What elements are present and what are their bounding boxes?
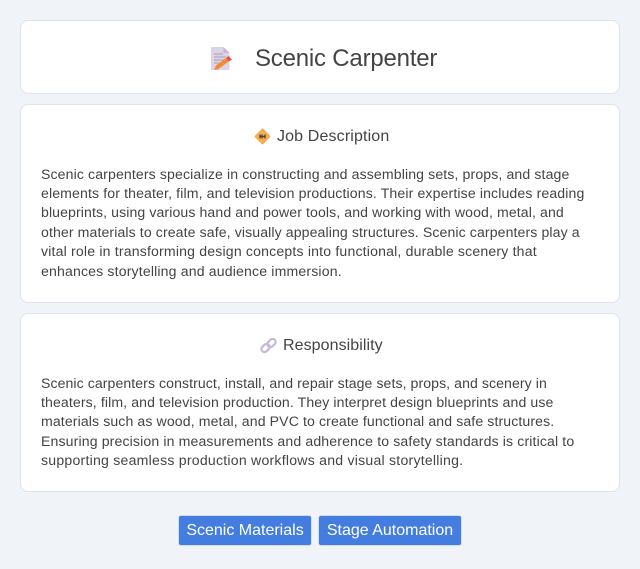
- panel: job description: [20, 104, 620, 303]
- job description text: elements for theater, film, and television productions. Their expertise includes reading: [41, 185, 584, 201]
- icon: chain link: [260, 338, 277, 354]
- responsibility text: supporting seamless production workflows and visual storytelling.: [41, 452, 463, 468]
- responsibility text: theaters, film, and television production. They interpret design blueprints and use: [41, 394, 553, 410]
- heading: responsibility: Responsibility: [283, 337, 383, 354]
- job description text: enhances storytelling and audience immersion.: [41, 263, 342, 279]
- heading: job description: Job Description: [277, 128, 389, 145]
- responsibility text: [41, 375, 574, 468]
- title: Scenic Carpenter: [255, 45, 437, 72]
- responsibility text: Ensuring precision in measurements and adherence to safety standards is critical to: [41, 433, 574, 449]
- job description text: Scenic carpenters specialize in constructing and assembling sets, props, and stage: [41, 166, 569, 182]
- job description text: blueprints, using various hand and power tools, and working with wood, metal, and: [41, 204, 564, 220]
- tag: stage automation: [319, 516, 461, 545]
- responsibility text: Scenic carpenters construct, install, and repair stage sets, props, and scenery in: [41, 375, 547, 391]
- job description text: vital role in transforming design concepts into functional, durable scenery that: [41, 243, 537, 259]
- responsibility text: materials such as wood, metal, and PVC to create functional and safe structures.: [41, 413, 554, 429]
- tag: scenic materials: [179, 516, 311, 545]
- icon: document with pencil: [211, 47, 232, 70]
- panel: responsibility: [20, 313, 620, 492]
- job description text: other materials to create safe, visually appealing structures. Scenic carpenters play a: [41, 224, 580, 240]
- icon: diamond sign: [254, 128, 270, 144]
- tag: stage automation: Stage Automation: [327, 522, 453, 539]
- job description text: [41, 166, 584, 279]
- tag: scenic materials: Scenic Materials: [186, 522, 304, 539]
- title card: [20, 20, 620, 94]
